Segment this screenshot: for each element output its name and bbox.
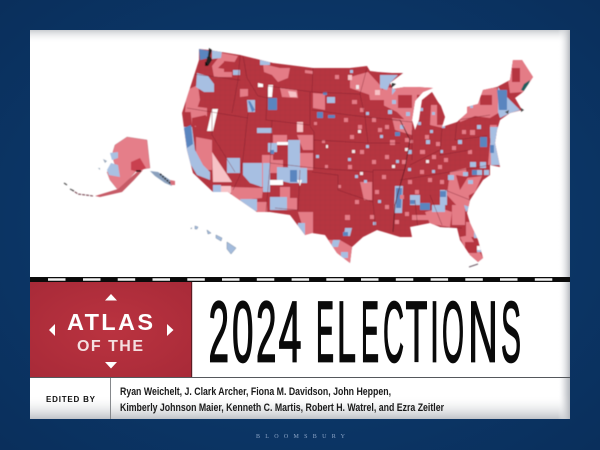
title: OF THE: OF THE: [77, 338, 143, 355]
main title: 2024 ELECTIONS: L: [337, 284, 356, 380]
main title: 2024 ELECTIONS: 2: [256, 284, 276, 380]
main title: 2024 ELECTIONS: T: [406, 284, 428, 380]
map: Hawaii: [191, 226, 236, 254]
map: Florida Keys: [469, 264, 478, 267]
dark red patches inside pink: [192, 61, 520, 253]
main title: 2024 ELECTIONS: E: [361, 284, 379, 380]
main title: 2024 ELECTIONS: 0: [232, 284, 254, 380]
editors line 1: Ryan Weichelt, J. Clark Archer, Fiona M. Davidson, John Heppen,: [120, 386, 391, 398]
main title: 2024 ELECTIONS: E: [316, 284, 334, 380]
map panel: county results of the United States: [64, 45, 540, 270]
pale pink counties: [212, 75, 380, 193]
map: Alaska: [64, 137, 175, 197]
scattered counties: [314, 75, 475, 224]
map: contiguous United States: [175, 45, 540, 270]
red title panel: [30, 282, 192, 377]
icon: down triangle: [105, 362, 117, 368]
book cover: S: [501, 284, 521, 380]
white gaps for lakes and parks: [207, 83, 482, 250]
editors line 2: Kimberly Johnson Maier, Kenneth C. Martis, Robert H. Watrel, and Ezra Zeitler: [120, 402, 445, 414]
dark teal coast and metro counties: [521, 80, 530, 92]
light blue counties: [182, 49, 520, 258]
base republican counties: [175, 45, 540, 270]
icon: up triangle: [105, 294, 117, 300]
icon: right triangle: [167, 324, 174, 336]
publisher: Bloomsbury: BLOOMSBURY: [256, 434, 346, 440]
map: New England coast islands: [505, 108, 524, 114]
map: Puget Sound islands: [206, 48, 212, 66]
main title: 2024 ELECTIONS: 4: [278, 284, 302, 380]
map: Great Lakes islands: [391, 73, 404, 88]
main title: 2024 ELECTIONS: I: [430, 284, 439, 380]
checkered divider band: [30, 277, 570, 282]
main title: 2024 ELECTIONS: 2: [208, 284, 229, 380]
main title: 2024 ELECTIONS: C: [383, 284, 404, 380]
medium pink counties: [185, 53, 533, 263]
main title: 2024 ELECTIONS: O: [442, 284, 464, 380]
icon: left triangle: [49, 324, 55, 336]
credits row: [30, 377, 570, 419]
edge shading: [30, 30, 570, 419]
label: edited by: EDITED BY: [46, 395, 96, 404]
white panel: [30, 30, 570, 419]
title: ATLAS: ATLAS: [67, 309, 153, 335]
state borders: [187, 55, 490, 230]
main title: 2024 ELECTIONS: N: [468, 284, 498, 380]
darker blue counties: [184, 49, 507, 236]
